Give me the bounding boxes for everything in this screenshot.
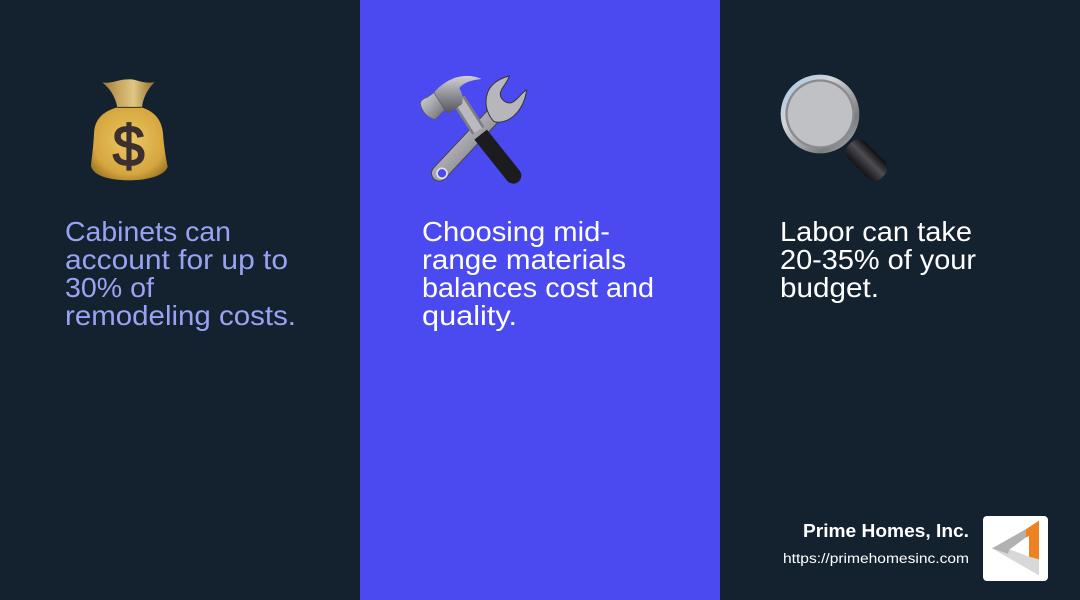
logo (983, 516, 1048, 581)
icon: money bag: $ (113, 114, 145, 178)
icon: money bag (91, 79, 168, 180)
panel: right background (720, 0, 1080, 600)
text: cabinets fact: account for up to (65, 244, 288, 275)
text: labor fact: 20-35% of your (780, 244, 976, 275)
text: cabinets fact: 30% of (65, 272, 154, 303)
panel: left background (0, 0, 360, 600)
text: cabinets fact (65, 216, 296, 331)
text: materials fact (422, 216, 654, 331)
icon: hammer and wrench (420, 76, 527, 184)
text: labor fact: budget. (780, 272, 879, 303)
text: cabinets fact: remodeling costs. (65, 300, 296, 331)
text: labor fact: Labor can take (780, 216, 972, 247)
footer: website url: https://primehomesinc.com (783, 551, 969, 566)
hammer (420, 76, 521, 184)
text: materials fact: quality. (422, 300, 517, 331)
text: cabinets fact: Cabinets can (65, 216, 231, 247)
wrench (437, 76, 527, 178)
text: labor fact (780, 216, 976, 303)
panel: middle background (360, 0, 720, 600)
icon: magnifying glass (781, 75, 892, 185)
footer: company name: Prime Homes, Inc. (803, 520, 969, 541)
text: materials fact: range materials (422, 244, 626, 275)
text: materials fact: Choosing mid- (422, 216, 610, 247)
text: materials fact: balances cost and (422, 272, 654, 303)
